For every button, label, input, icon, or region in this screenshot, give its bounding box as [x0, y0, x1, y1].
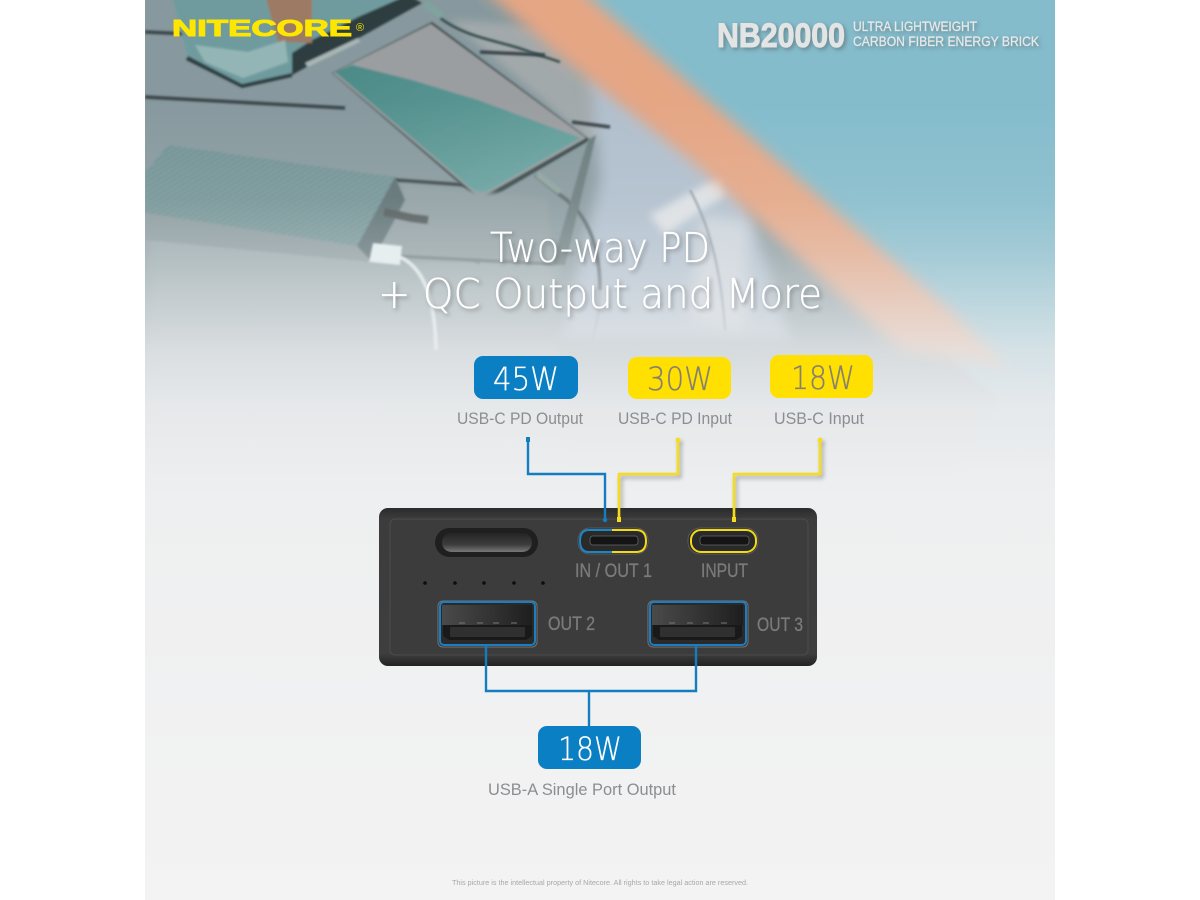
- charging cables: [425, 4, 725, 345]
- connector: 30W to in/out 1: [617, 438, 680, 522]
- orange band: [472, 0, 1010, 370]
- badge: 45W USB-C PD output: USB-C PD Output: [457, 409, 583, 428]
- title: Two-way PD: [490, 224, 710, 272]
- port labels: OUT 2: [548, 614, 595, 635]
- port labels: OUT 3: [757, 615, 803, 636]
- badge: 45W USB-C PD output: [457, 356, 583, 428]
- badge: 30W USB-C PD input: USB-C PD Input: [618, 409, 732, 428]
- port labels: INPUT: [701, 561, 748, 582]
- badge: 30W USB-C PD input: [618, 357, 732, 428]
- phone: [332, 22, 590, 203]
- connector: USB-A ports to 18W: [486, 645, 696, 726]
- badge: 18W USB-C input: 18W: [791, 359, 855, 397]
- product name: ULTRA LIGHTWEIGHT: [853, 19, 977, 34]
- table reflection: [454, 19, 599, 138]
- table frame: [428, 188, 511, 260]
- indicator dots: [423, 581, 545, 585]
- power bank front panel: [379, 508, 817, 666]
- USB-A port: out 3: [648, 601, 748, 647]
- USB-C port: in / out 1: [578, 528, 648, 554]
- title: + QC Output and More: [378, 270, 822, 318]
- port labels: [548, 561, 803, 636]
- image fade: [145, 141, 1055, 900]
- game console: [172, 0, 422, 88]
- badge: 18W USB-A single port output: [488, 726, 676, 799]
- product name: NB20000: [717, 17, 845, 55]
- badge: 18W USB-C input: [770, 355, 873, 428]
- power button: [435, 528, 538, 557]
- white USB plug and cable: [369, 243, 436, 350]
- connector: 45W to in/out 1: [526, 437, 607, 522]
- power bank: [145, 145, 428, 262]
- logo: Nitecore: ®: [356, 22, 364, 34]
- copyright note: This picture is the intellectual property of Nitecore. All rights to take legal action are reserved.: [452, 878, 748, 887]
- logo: Nitecore: NITECORE: [172, 15, 352, 41]
- USB-C port: input: [688, 528, 758, 554]
- connector: 18W to input: [732, 438, 822, 522]
- table strips: [145, 32, 610, 186]
- product name: CARBON FIBER ENERGY BRICK: [853, 34, 1039, 49]
- logo: Nitecore: [172, 15, 364, 41]
- background photo: [100, 0, 1055, 900]
- port labels: IN / OUT 1: [575, 561, 652, 582]
- product name: [717, 17, 1039, 55]
- badge: 18W USB-C input: USB-C Input: [774, 409, 864, 428]
- badge: 18W USB-A single port output: 18W: [558, 730, 622, 768]
- shirt area: [560, 70, 790, 340]
- USB-A port: out 2: [438, 601, 537, 647]
- title: [378, 224, 822, 318]
- badge: 45W USB-C PD output: 45W: [493, 360, 559, 398]
- badge: 18W USB-A single port output: USB-A Single Port Output: [488, 780, 676, 799]
- badge: 30W USB-C PD input: 30W: [647, 360, 713, 398]
